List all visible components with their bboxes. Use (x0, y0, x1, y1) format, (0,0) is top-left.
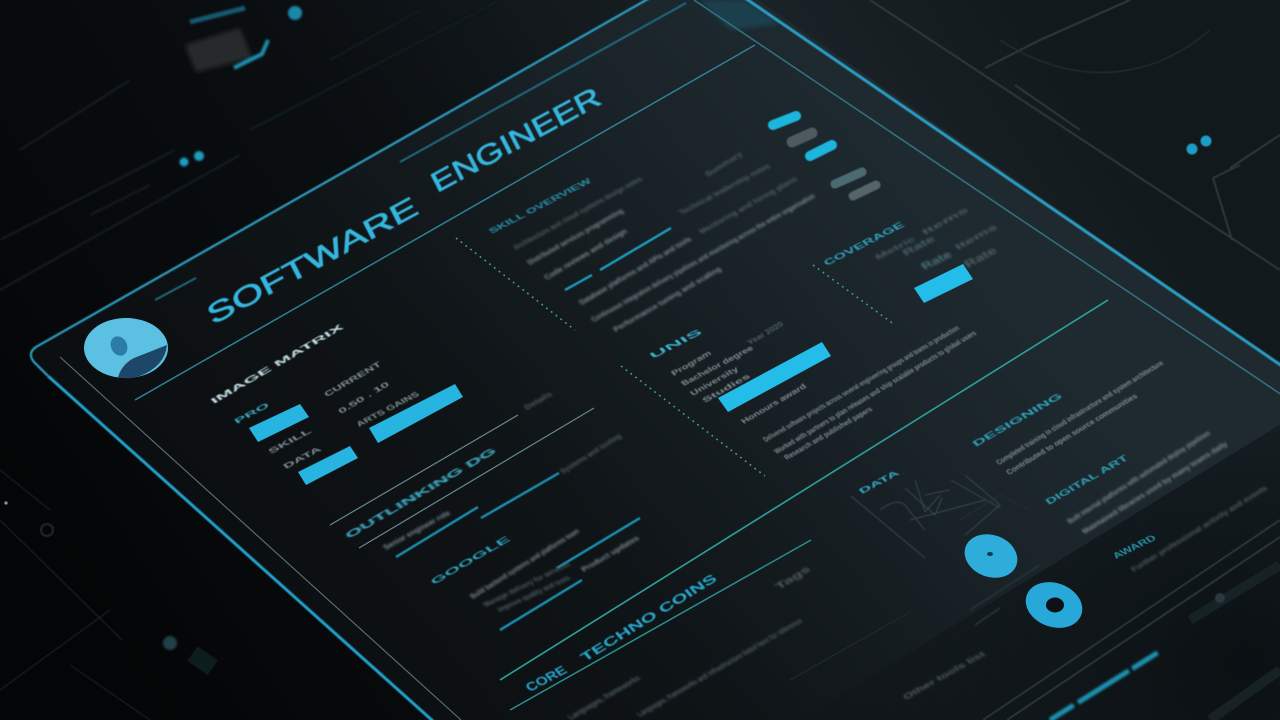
bottom section text: Languages, frameworks (565, 673, 643, 720)
bottom section text: Languages, frameworks and infrastructure listed here for reference (635, 617, 805, 719)
avatar portrait (84, 318, 168, 378)
coverage small labels: Items (921, 207, 971, 237)
long section rule (500, 300, 1108, 680)
background circuitry: lower left (0, 470, 218, 720)
tag pills (773, 116, 876, 196)
profile labels: ARTS GAINS (354, 390, 422, 428)
education text: Program (670, 349, 714, 378)
education notes: Research and published papers (782, 405, 874, 461)
coverage small labels: Rate (960, 244, 1000, 270)
coverage bar (914, 264, 973, 303)
experience progress lines (396, 473, 640, 630)
profile labels (232, 360, 422, 471)
education text: Year 2020 (746, 320, 786, 347)
ring hole (1046, 598, 1064, 612)
bottom section text (565, 563, 987, 720)
experience subheading: GOOGLE (429, 534, 514, 587)
top section text lines: Mentoring and hiring plans (697, 175, 800, 236)
footer strip (983, 520, 1280, 720)
avatar head (108, 334, 130, 358)
experience text lines: Senior engineer role (381, 509, 452, 551)
network diagram (851, 470, 1030, 558)
bottom section text: Other tools list (901, 650, 987, 701)
section heading: education: UNIS (647, 327, 706, 361)
profile labels: 0.50 . 10 (337, 381, 392, 416)
coverage small labels: Metric (874, 235, 919, 262)
title: SOFTWARE (202, 191, 423, 331)
bottom section heading: TECHNO COINS (578, 571, 720, 664)
top section text lines: Database platforms and APIs and tools (577, 235, 694, 307)
profile labels: CURRENT (322, 360, 385, 399)
experience text lines: Product updates (579, 534, 642, 574)
profile skill bars (249, 384, 463, 485)
top section text lines (511, 150, 817, 334)
corner wedge at top of panel (700, 0, 780, 30)
section rules: organizations (330, 408, 594, 548)
experience text lines: Systems and tooling (558, 432, 624, 475)
certifications text (995, 360, 1165, 476)
background circuitry: upper right (870, 0, 1280, 270)
section heading: projects: DIGITAL ART (1044, 453, 1132, 507)
education text (670, 320, 786, 405)
section heading: profile: IMAGE MATRIX (208, 322, 346, 405)
experience text lines: Improve quality and tests (495, 574, 573, 613)
coverage small labels: Rate (899, 233, 938, 258)
education bar (718, 342, 831, 412)
top section text lines: Performance tuning and scaling (612, 266, 724, 334)
section heading: certifications: DESIGNING (970, 391, 1065, 449)
profile labels: PRO (232, 401, 272, 426)
avatar shoulders (118, 345, 167, 378)
education text: University (689, 366, 741, 398)
experience text lines (381, 391, 642, 613)
experience text lines: Build backend systems and platforms team (469, 528, 582, 601)
coverage small labels (874, 207, 1000, 272)
diagram title: DATA (858, 470, 902, 496)
certifications text: Contributed to open source communities (1004, 392, 1140, 476)
top section heading: skills: SKILL OVERVIEW (487, 177, 594, 236)
background circuitry: upper left (0, 0, 500, 290)
section heading: organizations: OUTLINKING DG (342, 445, 499, 541)
coverage small labels: Rate (917, 248, 956, 272)
coverage small labels: Items (954, 223, 1000, 252)
education text: Bachelor degree (679, 344, 756, 387)
top section text lines: Distributed services programming (525, 207, 625, 266)
top section text lines: Technical leadership notes (677, 162, 772, 216)
education notes: Honours award (739, 382, 809, 425)
profile labels: DATA (282, 445, 325, 471)
chart circle: filled donut (958, 527, 1024, 585)
chart circle: ring donut (1019, 574, 1089, 636)
title: ENGINEER (426, 81, 606, 199)
dotted section dividers (456, 238, 895, 476)
education text: Studies (701, 373, 753, 405)
top section text lines: Code reviews and design (542, 227, 629, 281)
bottom section heading (523, 571, 720, 695)
bottom section text: Tags (772, 563, 813, 592)
top section accent lines (565, 228, 671, 290)
top section text lines: Architecture and cloud systems design notes (511, 175, 644, 251)
donut centre dot (987, 552, 993, 556)
bottom section rule (510, 540, 811, 710)
projects text (1065, 429, 1269, 573)
education notes (739, 324, 978, 461)
experience text lines: Details (523, 391, 556, 412)
profile labels: SKILL (267, 428, 314, 456)
top section text lines: Summary (704, 150, 745, 179)
panel shading lower right (800, 400, 1280, 720)
experience text lines: Manage delivery for services (481, 560, 572, 608)
section heading: coverage: COVERAGE (822, 220, 907, 268)
faint chart labels (970, 565, 1040, 625)
small heading: awards: AWARD (1110, 533, 1159, 561)
bottom section heading: CORE (523, 664, 571, 695)
